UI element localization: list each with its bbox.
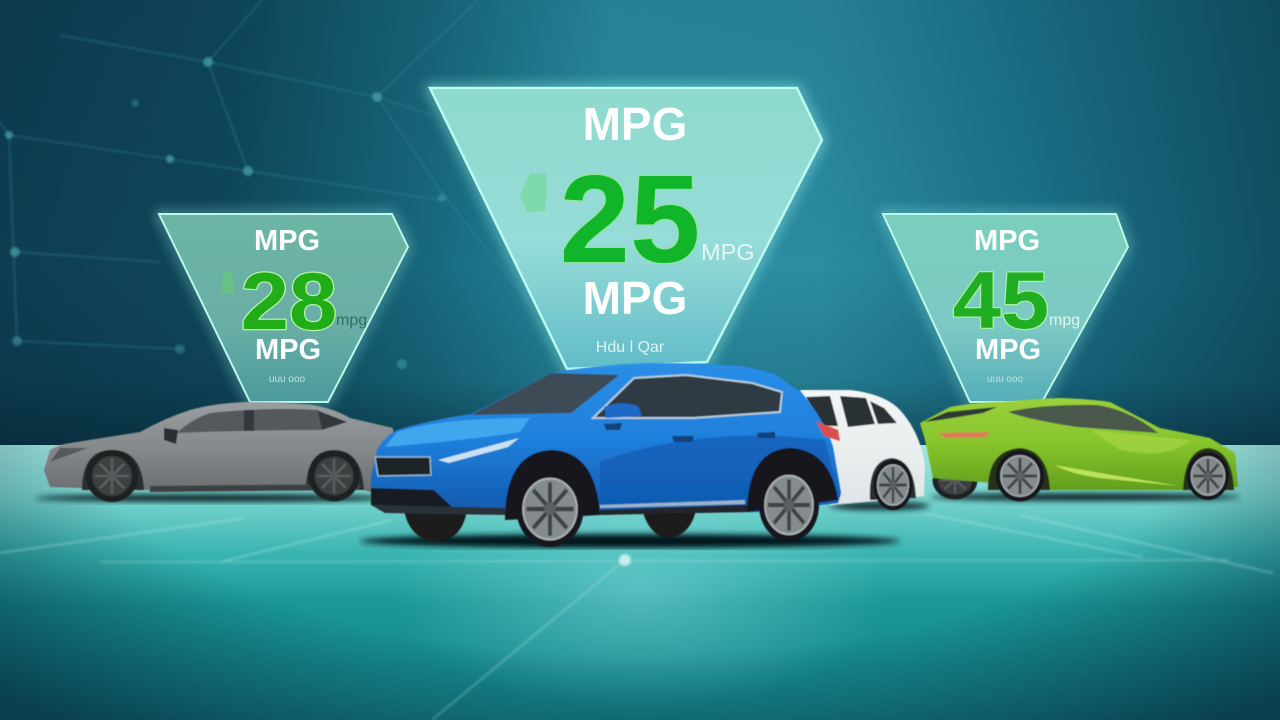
icon: center leaf [520,173,547,212]
car: blue SUV [360,363,900,548]
background wall [0,0,1280,446]
panel: right MPG 45 [883,214,1128,402]
label: right top MPG: MPG [974,225,1040,257]
unit: center MPG: MPG [701,239,755,265]
label: center top MPG: MPG [583,98,687,150]
far wheels [404,505,697,542]
small caption: left: uuu ooo [269,374,306,385]
panel: left MPG 28 [159,214,408,402]
car: white hatchback [800,390,930,510]
value: center 25: 25 [560,150,700,289]
unit: right mpg: mpg [1049,312,1080,329]
floor [0,445,1280,720]
label: center bottom MPG: MPG [583,272,687,324]
unit: left mpg: mpg [336,312,367,329]
icon: left leaf [220,271,234,294]
small caption: right: uuu ooo [987,374,1024,385]
value: right 45: 45 [953,255,1049,345]
panel: center MPG 25 [430,88,822,369]
car: green hatchback [920,398,1240,502]
value: left 28: 28 [241,256,337,346]
network lines background [0,0,562,369]
label: right bottom MPG: MPG [975,334,1041,366]
car: gray sedan [35,402,402,502]
label: left top MPG: MPG [254,225,320,257]
small caption: center: Hdu l Qar [596,339,665,356]
label: left bottom MPG: MPG [255,334,321,366]
